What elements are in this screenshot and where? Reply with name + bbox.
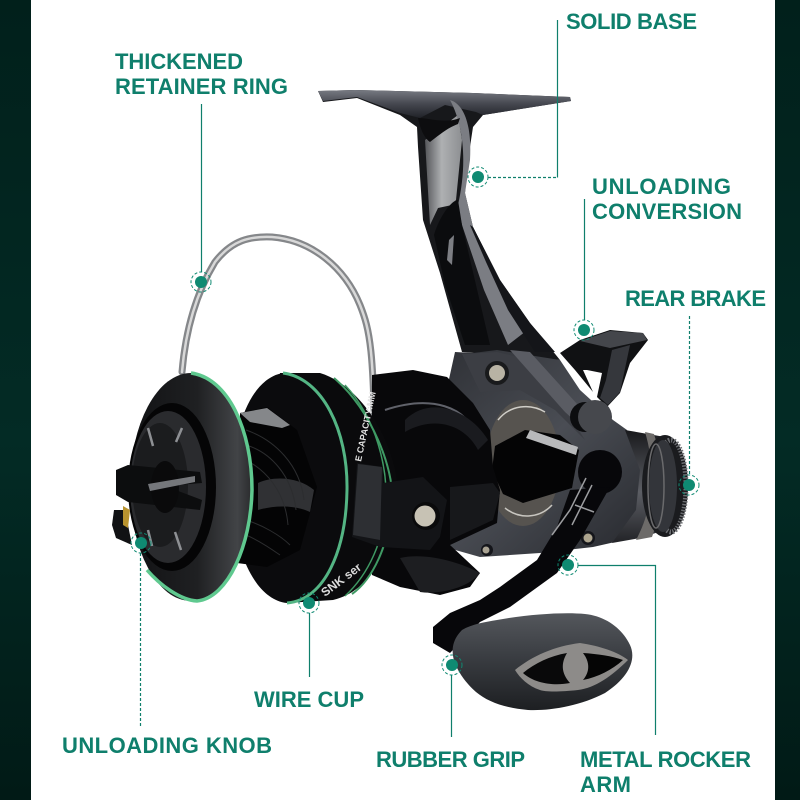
reel foot and stem bbox=[318, 90, 571, 360]
leader unloading knob bbox=[140, 553, 142, 728]
callout: rear brake bbox=[625, 286, 766, 495]
leader thickened retainer ring bbox=[200, 104, 202, 272]
leader dashed solid base bbox=[488, 176, 557, 178]
leader metal rocker arm bbox=[578, 566, 656, 735]
callout: thickened retainer ring bbox=[115, 49, 288, 292]
leader rear brake bbox=[688, 316, 690, 475]
label unloading knob: UNLOADING KNOB bbox=[62, 733, 272, 758]
right dark side band bbox=[775, 0, 800, 800]
label thickened retainer ring: THICKENED bbox=[115, 49, 243, 74]
reel body housing bbox=[420, 350, 648, 557]
gear recess and shaft bbox=[486, 400, 579, 526]
callout: metal rocker arm bbox=[558, 555, 751, 797]
left dark side band bbox=[0, 0, 31, 800]
spool skirt bbox=[280, 373, 398, 603]
unloading conversion lever bbox=[560, 330, 648, 407]
rear brake dial bbox=[642, 435, 688, 537]
callout: unloading conversion bbox=[574, 174, 742, 340]
marker metal rocker arm bbox=[558, 555, 578, 575]
marker unloading knob bbox=[131, 533, 151, 553]
spool label text on skirt: SNK ser bbox=[318, 560, 364, 599]
spool rear flange bbox=[232, 373, 347, 603]
spool label text on skirt: E CAPACITY:MM bbox=[353, 391, 378, 462]
bail arm with screw bbox=[352, 463, 500, 550]
spool line body bbox=[237, 407, 317, 567]
label thickened retainer ring: RETAINER RING bbox=[115, 74, 288, 99]
spool front flange bbox=[128, 373, 252, 601]
callout: wire cup bbox=[254, 593, 364, 712]
callout: solid base bbox=[468, 9, 697, 187]
label metal rocker arm: METAL ROCKER bbox=[580, 747, 751, 772]
label wire cup: WIRE CUP bbox=[254, 687, 364, 712]
rotor cup bbox=[372, 370, 500, 595]
leader line solid base bbox=[556, 20, 558, 178]
marker solid base bbox=[468, 167, 488, 187]
marker thickened retainer ring bbox=[191, 272, 211, 292]
callout: rubber grip bbox=[376, 655, 525, 772]
marker rubber grip bbox=[442, 655, 462, 675]
spool label text on skirt bbox=[318, 391, 378, 599]
lever pivot knob bbox=[570, 400, 612, 434]
marker rear brake bbox=[679, 475, 699, 495]
label unloading conversion: CONVERSION bbox=[592, 199, 742, 224]
callout: unloading knob bbox=[62, 533, 272, 758]
screws lower bbox=[481, 531, 595, 556]
spool knob bbox=[112, 461, 202, 545]
label rear brake: REAR BRAKE bbox=[625, 286, 766, 311]
marker wire cup bbox=[299, 593, 319, 613]
leader wire cup bbox=[308, 613, 310, 677]
label solid base: SOLID BASE bbox=[566, 9, 697, 34]
marker unloading conversion bbox=[574, 320, 594, 340]
label rubber grip: RUBBER GRIP bbox=[376, 747, 525, 772]
label unloading conversion: UNLOADING bbox=[592, 174, 731, 199]
handle arm bbox=[433, 450, 622, 653]
reel product illustration bbox=[112, 90, 688, 710]
screw upper bbox=[485, 361, 509, 385]
label metal rocker arm: ARM bbox=[580, 772, 631, 797]
leader unloading conversion bbox=[584, 199, 586, 320]
leader rubber grip bbox=[450, 675, 452, 737]
rubber grip bbox=[453, 613, 632, 710]
bail wire bbox=[182, 237, 375, 463]
rear cylinder bbox=[612, 430, 665, 543]
